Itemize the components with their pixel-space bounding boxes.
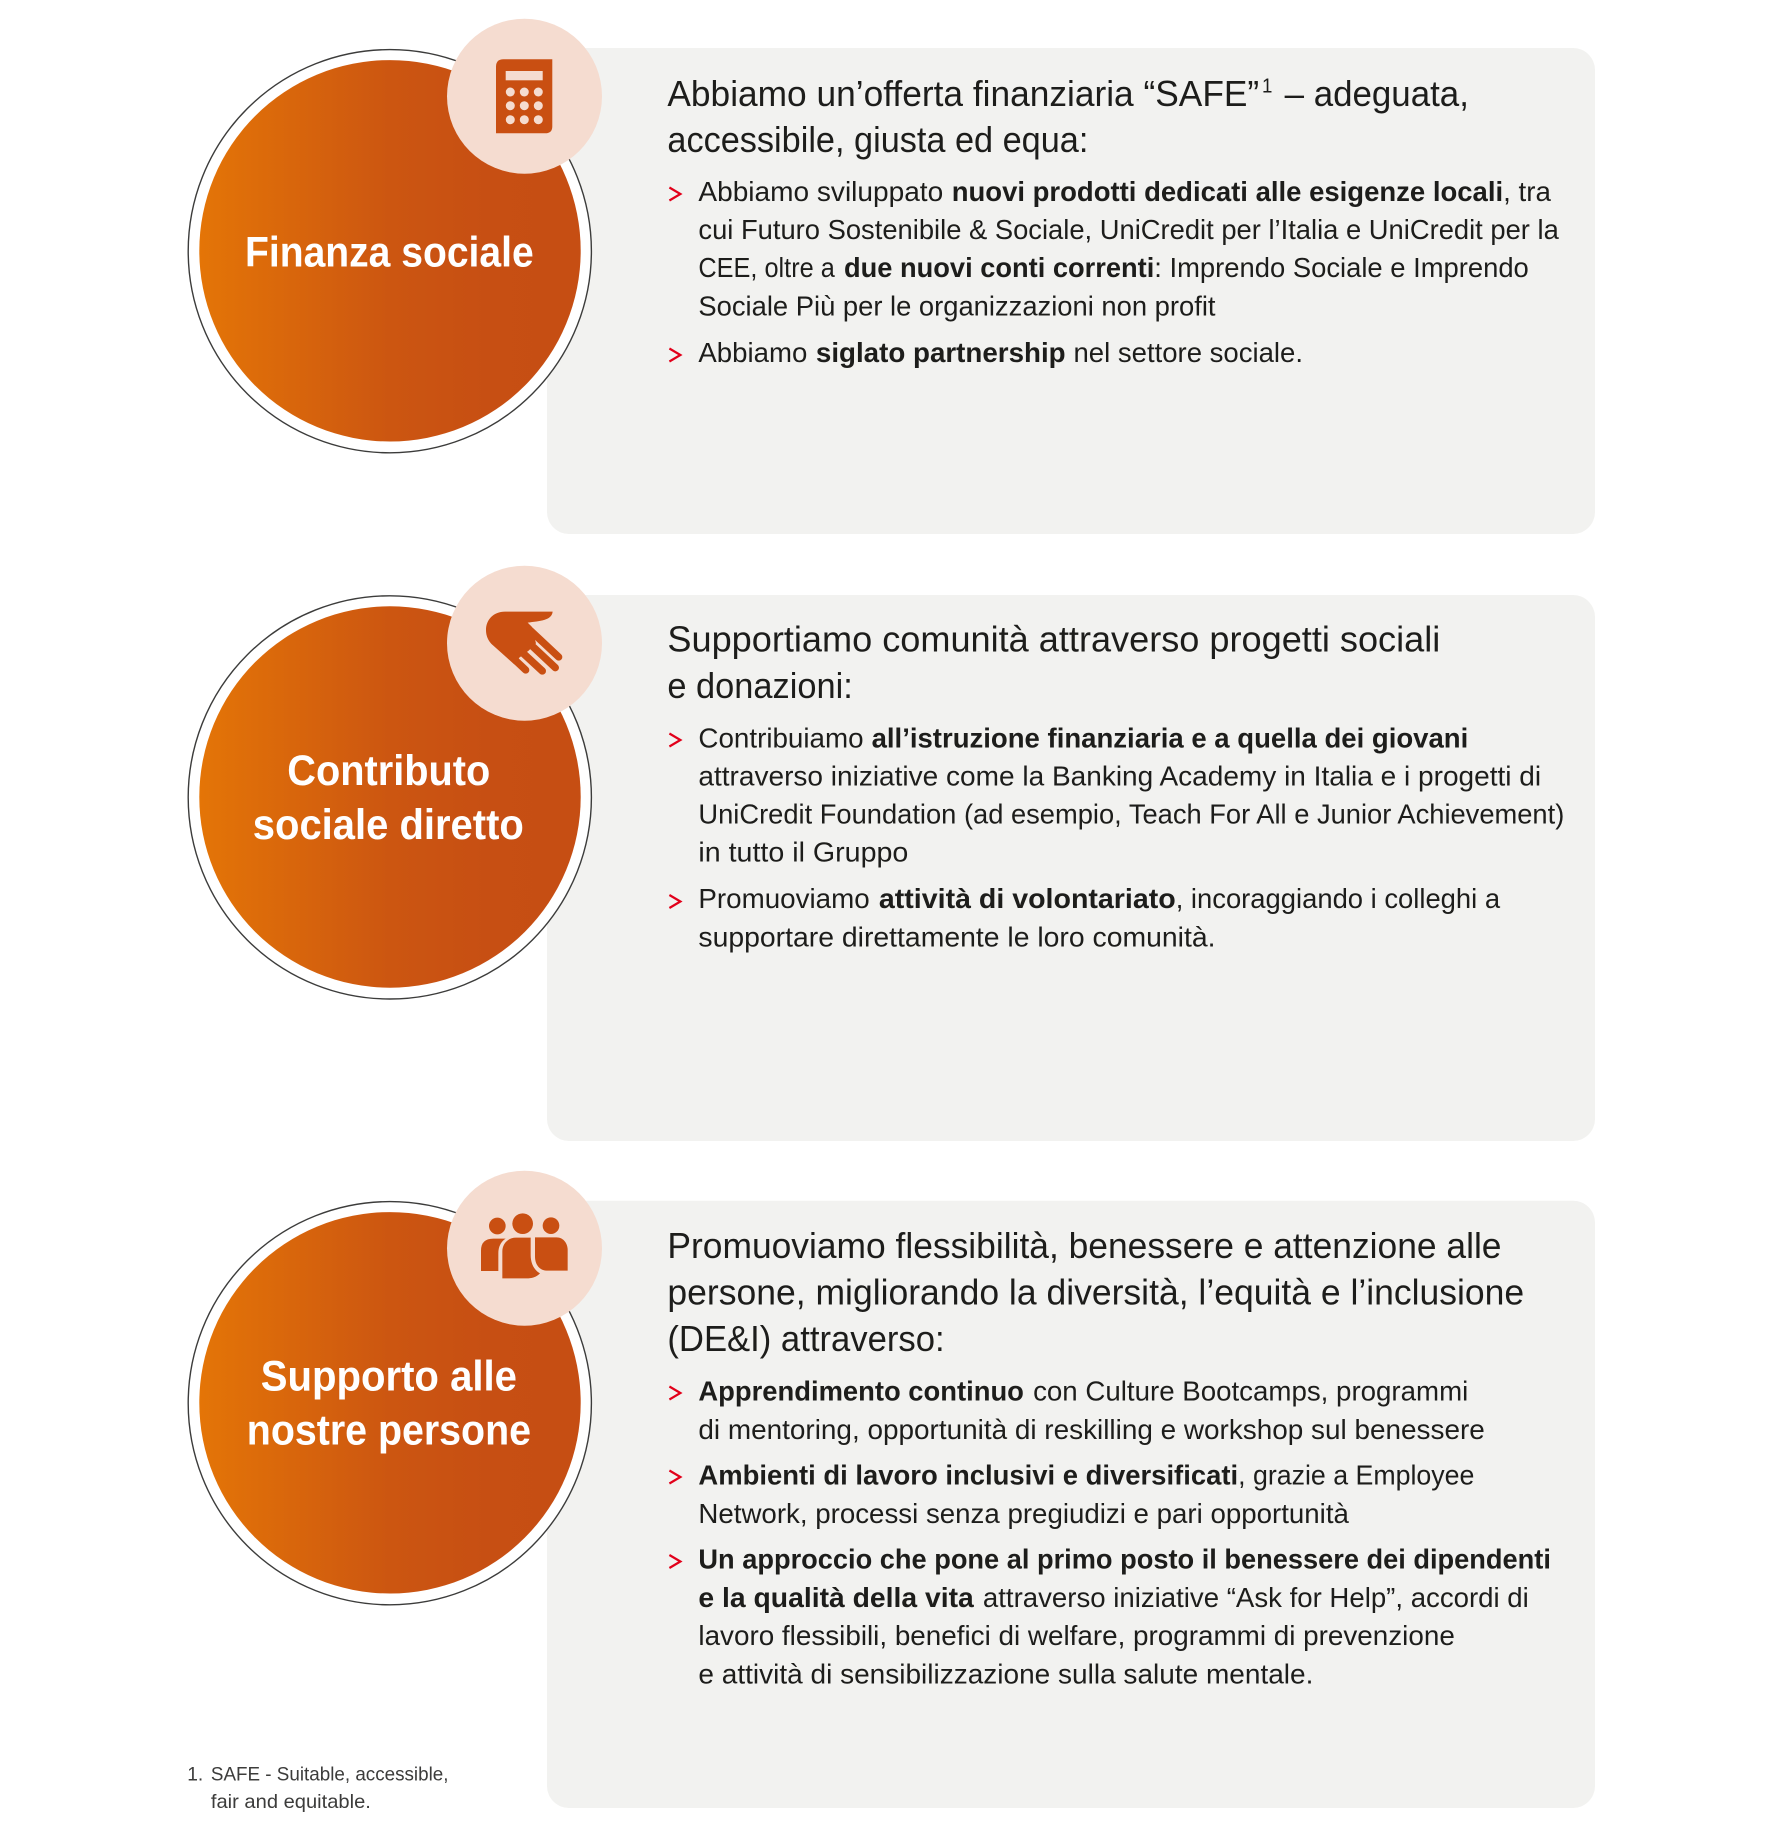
- bullet: nuovi prodotti: : Imprendo Sociale e Imprendo: [1154, 252, 1529, 283]
- bullet: istruzione finanziaria: Contribuiamo: [698, 722, 864, 754]
- bullet: apprendimento continuo: [669, 1376, 1485, 1445]
- bullet: benessere dei dipendenti: e attività di sensibilizzazione sulla salute mentale.: [698, 1658, 1313, 1689]
- bullet: apprendimento continuo: con Culture Bootcamps, programmi: [1033, 1376, 1468, 1406]
- bullet: partnership: [669, 337, 1303, 368]
- label: supporto alle nostre persone: nostre persone: [247, 1406, 531, 1454]
- panel: finanza sociale text: [547, 48, 1595, 534]
- footnote: [187, 1763, 448, 1813]
- bullet: nuovi prodotti: CEE, oltre a: [698, 252, 835, 283]
- bullet: istruzione finanziaria: attraverso iniziative come la Banking Academy in Italia e i progetti di: [698, 760, 1541, 792]
- bullet: partnership: Abbiamo: [698, 337, 807, 368]
- bullet: benessere dei dipendenti: Un approccio che pone al primo posto il benessere dei dipendenti: [698, 1544, 1551, 1575]
- label: contributo sociale diretto: Contributo: [287, 747, 490, 795]
- bullet: partnership: siglato partnership: [816, 337, 1066, 368]
- circle: supporto alle nostre persone: [188, 1202, 591, 1605]
- label: supporto alle nostre persone: Supporto alle: [261, 1352, 517, 1400]
- heading: offerta SAFE: Abbiamo un’offerta finanziaria “SAFE”: [667, 73, 1259, 114]
- footnote: fair and equitable.: [211, 1791, 371, 1813]
- bullet: volontariato: [669, 883, 1501, 952]
- bullet: nuovi prodotti: Sociale Più per le organizzazioni non profit: [698, 290, 1216, 322]
- panel: contributo sociale diretto text: [547, 595, 1595, 1141]
- heading: offerta SAFE: – adeguata,: [1285, 73, 1469, 114]
- heading: flessibilità e DE&I: (DE&I) attraverso:: [667, 1318, 945, 1359]
- bullet: ambienti inclusivi: [669, 1460, 1474, 1529]
- icon: people badge: [447, 1171, 602, 1326]
- heading: flessibilità e DE&I: Promuoviamo flessibilità, benessere e attenzione alle: [667, 1225, 1502, 1266]
- bullet: benessere dei dipendenti: attraverso iniziative “Ask for Help”, accordi di: [983, 1582, 1529, 1613]
- bullet: volontariato: attività di volontariato: [879, 883, 1176, 914]
- bullet: nuovi prodotti: , tra: [1503, 176, 1552, 207]
- bullet: nuovi prodotti: nuovi prodotti dedicati alle esigenze locali: [952, 176, 1503, 207]
- circle: finanza sociale: [188, 50, 591, 453]
- bullet: istruzione finanziaria: [669, 722, 1564, 868]
- bullet: istruzione finanziaria: UniCredit Foundation (ad esempio, Teach For All e Junior Achievement): [698, 798, 1564, 830]
- heading: progetti sociali e donazioni: [667, 619, 1440, 706]
- bullet: volontariato: , incoraggiando i colleghi a: [1176, 883, 1501, 914]
- heading: progetti sociali e donazioni: e donazioni:: [667, 665, 853, 706]
- heading: offerta SAFE: [667, 60, 1469, 160]
- bullet: ambienti inclusivi: Network, processi senza pregiudizi e pari opportunità: [698, 1498, 1350, 1529]
- label: finanza sociale: Finanza sociale: [245, 228, 534, 276]
- bullet: volontariato: supportare direttamente le loro comunità.: [698, 922, 1215, 952]
- icon: calculator badge: [447, 19, 602, 174]
- heading: offerta SAFE: 1: [1262, 76, 1272, 98]
- bullet: nuovi prodotti: cui Futuro Sostenibile & Sociale, UniCredit per l’Italia e UniCredit per la: [698, 214, 1559, 245]
- heading: flessibilità e DE&I: persone, migliorando la diversità, l’equità e l’inclusione: [667, 1271, 1524, 1312]
- panel: supporto alle nostre persone text: [547, 1201, 1595, 1808]
- bullet: apprendimento continuo: Apprendimento continuo: [698, 1376, 1024, 1406]
- bullet: ambienti inclusivi: , grazie a Employee: [1238, 1460, 1474, 1491]
- footnote: SAFE - Suitable, accessible,: [211, 1763, 448, 1785]
- bullet: istruzione finanziaria: in tutto il Gruppo: [698, 836, 908, 868]
- label: contributo sociale diretto: [253, 747, 524, 849]
- bullet: nuovi prodotti: Abbiamo sviluppato: [698, 176, 943, 207]
- label: contributo sociale diretto: sociale diretto: [253, 801, 524, 849]
- bullet: benessere dei dipendenti: [669, 1544, 1551, 1689]
- circle: contributo sociale diretto: [188, 596, 591, 999]
- label: supporto alle nostre persone: [247, 1352, 531, 1454]
- bullet: nuovi prodotti: [669, 176, 1559, 322]
- bullet: volontariato: Promuoviamo: [698, 883, 870, 914]
- bullet: apprendimento continuo: di mentoring, opportunità di reskilling e workshop sul benessere: [698, 1414, 1485, 1445]
- bullet: partnership: nel settore sociale.: [1073, 337, 1303, 368]
- heading: progetti sociali e donazioni: Supportiamo comunità attraverso progetti sociali: [667, 619, 1440, 660]
- heading: flessibilità e DE&I: [667, 1225, 1524, 1359]
- footnote: 1.: [187, 1763, 203, 1785]
- bullet: benessere dei dipendenti: lavoro flessibili, benefici di welfare, programmi di prevenzione: [698, 1620, 1455, 1651]
- bullet: benessere dei dipendenti: e la qualità della vita: [698, 1582, 975, 1613]
- bullet: ambienti inclusivi: Ambienti di lavoro inclusivi e diversificati: [698, 1460, 1238, 1491]
- icon: open hand badge: [447, 566, 602, 721]
- heading: offerta SAFE: accessibile, giusta ed equa:: [667, 119, 1088, 160]
- bullet: istruzione finanziaria: all’istruzione finanziaria e a quella dei giovani: [872, 722, 1468, 754]
- bullet: nuovi prodotti: due nuovi conti correnti: [844, 252, 1154, 283]
